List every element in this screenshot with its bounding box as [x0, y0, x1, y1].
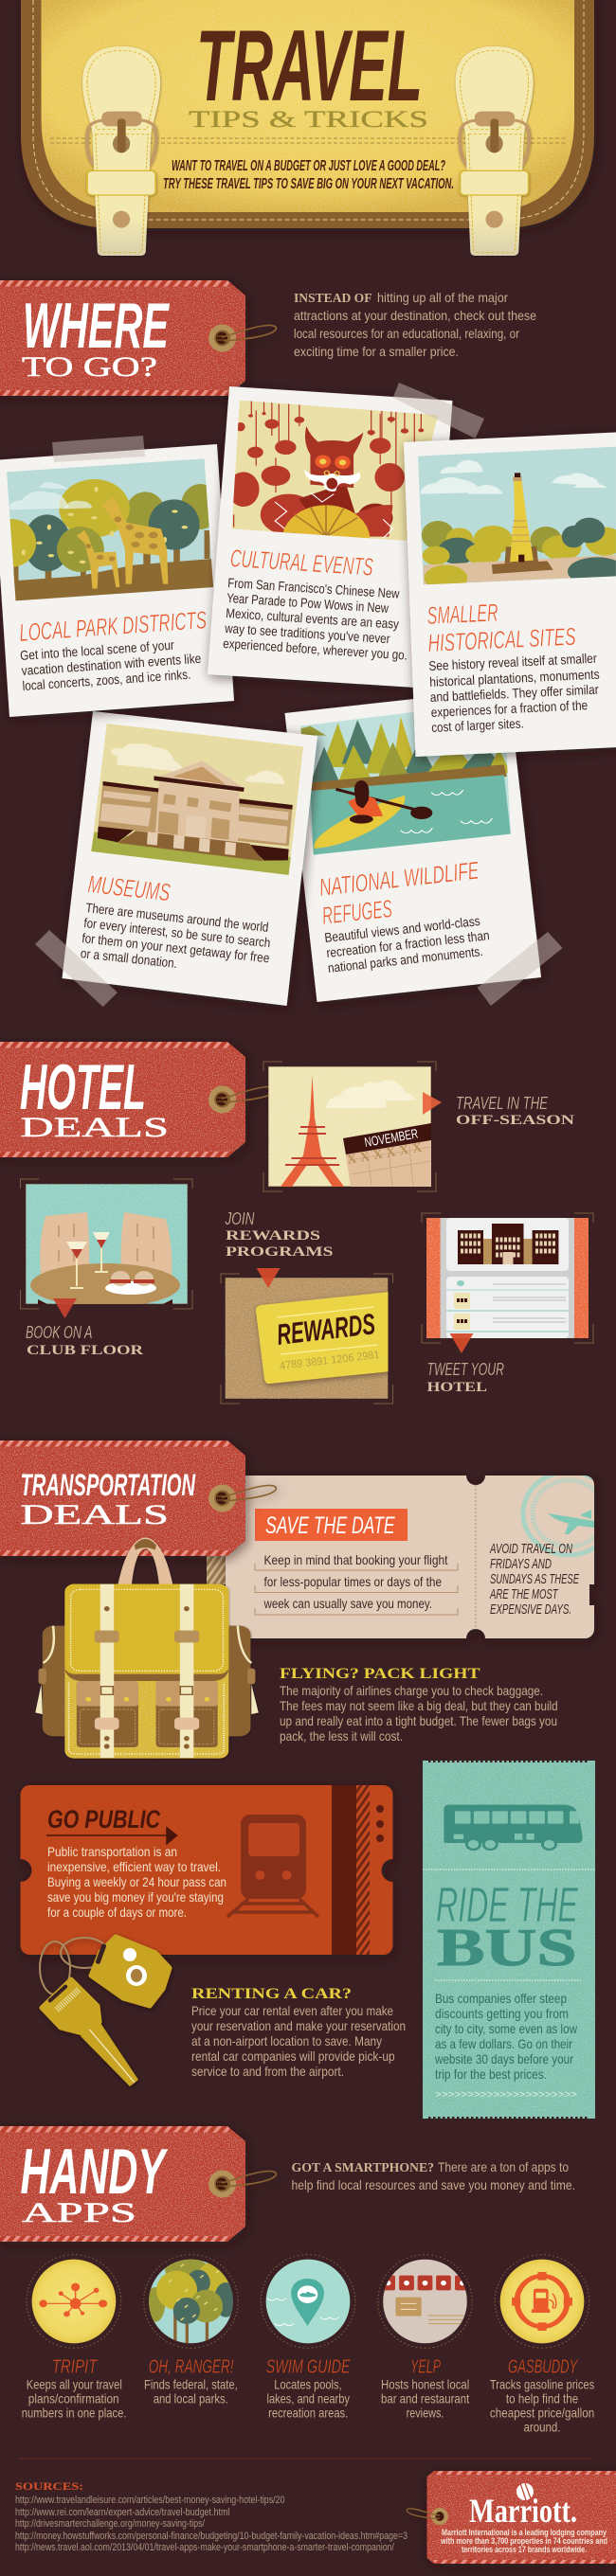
- save the date text: week can usually save you money.: [263, 1596, 432, 1611]
- photo: book on a club floor: [26, 1184, 188, 1318]
- label: book on a club floor: CLUB FLOOR: [27, 1343, 143, 1358]
- label: travel in the off-season: OFF-SEASON: [456, 1113, 574, 1128]
- text: renting a car: service to and from the airport.: [191, 2064, 344, 2079]
- text: renting a car: at a non-airport location to save. Many: [191, 2033, 382, 2048]
- body text: city to city, some even as low: [435, 2021, 578, 2036]
- perforation: [475, 1485, 477, 1629]
- text: recreation for a fraction less than: [326, 927, 490, 960]
- body text: inexpensive, efficient way to travel.: [47, 1859, 221, 1874]
- left strap: [82, 46, 160, 256]
- text: [223, 575, 408, 663]
- avoid travel text: [489, 1542, 579, 1618]
- app: swim guide: recreation areas.: [268, 2406, 348, 2421]
- text: Get into the local scene of your: [20, 637, 175, 663]
- body text: save you big money if you're staying: [47, 1889, 224, 1905]
- app: yelp: [381, 2357, 469, 2421]
- text: flying pack light: The fees may not seem like a big deal, but they can build: [280, 1698, 558, 1713]
- tape: [392, 383, 484, 438]
- intro text: handy apps: [292, 2159, 575, 2192]
- icon: yelp: [378, 2255, 472, 2348]
- label: tweet your hotel: TWEET YOUR: [426, 1360, 504, 1379]
- sources: http://drivesmarterchallenge.org/money-saving-tips/: [15, 2518, 206, 2530]
- photo: rewards card: [226, 1268, 390, 1399]
- panel: ride the bus: [423, 1761, 595, 2119]
- save the date text: for less-popular times or days of the: [263, 1574, 442, 1589]
- photo: travel in the off-season: [268, 1066, 442, 1187]
- text: way to see traditions you've never: [224, 620, 390, 646]
- section tag: hotel deals: [0, 1042, 277, 1157]
- text: Year Parade to Pow Wows in New: [226, 590, 390, 616]
- body text: Bus companies offer steep: [435, 1991, 567, 2006]
- avoid travel text: AVOID TRAVEL ON: [489, 1542, 572, 1557]
- scalloped edges: [428, 1762, 589, 2118]
- app: tripit: plans/confirmation: [28, 2391, 119, 2406]
- photo: tweet your hotel: [426, 1218, 589, 1353]
- intro text: where to go: attractions at your destination, check out these: [294, 308, 536, 323]
- text: [20, 637, 202, 693]
- text: renting a car: RENTING A CAR?: [191, 1986, 352, 2002]
- label: tweet your hotel: [426, 1360, 504, 1395]
- text: flying pack light: up and really eat into a tight budget. The fewer bags you: [280, 1713, 557, 1728]
- text: national parks and monuments.: [327, 943, 483, 975]
- title: CULTURAL EVENTS: [229, 544, 374, 581]
- divider: [423, 1869, 595, 1980]
- title: [426, 598, 577, 657]
- title: MUSEUMS: [86, 869, 172, 906]
- app: swim guide: SWIM GUIDE: [266, 2357, 351, 2378]
- label: join rewards programs: JOIN: [225, 1209, 255, 1228]
- ticket body: [226, 1476, 594, 1638]
- label: tweet your hotel: HOTEL: [426, 1380, 487, 1395]
- icon: train: [227, 1815, 318, 1917]
- intro text: where to go: exciting time for a smaller price.: [294, 344, 459, 359]
- background: [26, 1184, 188, 1304]
- app: tripit: TRIPIT: [52, 2357, 99, 2378]
- divider: [19, 2458, 592, 2460]
- label: book on a club floor: [26, 1323, 143, 1358]
- section tag: handy apps: [0, 2126, 277, 2242]
- text: renting a car: your reservation and make your reservation: [191, 2018, 406, 2033]
- tagline: [163, 158, 454, 192]
- hatch stub: [207, 1556, 227, 1584]
- sources: [15, 2479, 408, 2553]
- illustration: clouds: [326, 1080, 416, 1108]
- stitching: [33, 0, 584, 220]
- perforation dots: [376, 1805, 384, 1842]
- text: for them on your next getaway for free: [82, 930, 270, 965]
- body text: for a couple of days or more.: [47, 1905, 187, 1920]
- body text: as a few dollars. Go on their: [435, 2036, 572, 2051]
- seam: [50, 138, 566, 143]
- icon: swim guide: [261, 2255, 355, 2348]
- card paper: [208, 386, 453, 689]
- section tag: transportation deals: TRANSPORTATION: [21, 1468, 196, 1502]
- logo symbol: [516, 2483, 534, 2500]
- panel body: [423, 1761, 595, 2119]
- text: [324, 913, 490, 975]
- ticket: go public: [21, 1785, 392, 1955]
- body text: website 30 days before your: [434, 2051, 573, 2066]
- background: [268, 1066, 431, 1187]
- icon: gasbuddy: [495, 2255, 589, 2348]
- app: swim guide: Locates pools,: [274, 2377, 342, 2392]
- sponsor tag: marriott: [407, 2471, 616, 2564]
- card paper: [63, 711, 317, 1006]
- label: travel in the off-season: TRAVEL IN THE: [456, 1094, 549, 1113]
- title: LOCAL PARK DISTRICTS: [18, 605, 208, 647]
- section tag: handy apps: HANDY: [21, 2136, 169, 2208]
- feed panel: [446, 1277, 569, 1338]
- arrow: [450, 1333, 474, 1353]
- subtitle: TIPS & TRICKS: [189, 107, 428, 133]
- card paper: [404, 432, 616, 757]
- app: tripit: Keeps all your travel: [27, 2377, 122, 2392]
- section tag: transportation deals: DEALS: [21, 1499, 169, 1530]
- yellow rewards card: 4789 3891 1206 2981: [279, 1350, 380, 1372]
- text: local concerts, zoos, and ice rinks.: [22, 667, 191, 693]
- hotel panel: [446, 1218, 569, 1271]
- title: REFUGES: [320, 894, 394, 930]
- illustration: calendar: XXXXXX: [346, 1141, 424, 1168]
- stamp and plane: [521, 1476, 594, 1557]
- text: experienced before, wherever you go.: [223, 635, 408, 663]
- illustration: kayak: [300, 712, 511, 854]
- intro text: where to go: [294, 290, 536, 359]
- illustration: museum: [91, 724, 303, 875]
- arrow: [257, 1268, 281, 1288]
- app: yelp: bar and restaurant: [381, 2391, 469, 2406]
- sources: http://news.travel.aol.com/2013/04/01/travel-apps-make-your-smartphone-a-smarter-travel-companion/: [15, 2542, 395, 2553]
- app: gasbuddy: cheapest price/gallon: [490, 2406, 594, 2421]
- orange background: [426, 1218, 589, 1338]
- section tag: where to go: [0, 280, 277, 396]
- text: From San Francisco's Chinese New: [227, 575, 401, 601]
- card paper: [284, 689, 541, 1002]
- text: renting a car: rental car companies will provide pick-up: [191, 2048, 395, 2064]
- chevrons: >>>>>>>>>>>>>>>>>>>>>>: [435, 2089, 577, 2101]
- body text: Public transportation is an: [47, 1844, 177, 1859]
- body text: discounts getting you from: [435, 2006, 569, 2021]
- app: oh ranger: and local parks.: [154, 2391, 228, 2406]
- heading: GO PUBLIC: [47, 1805, 160, 1834]
- card paper: [0, 444, 234, 717]
- text: flying pack light: FLYING? PACK LIGHT: [280, 1666, 480, 1682]
- tape: [478, 932, 563, 1006]
- app: yelp: YELP: [410, 2357, 441, 2378]
- text: [80, 900, 271, 971]
- logo wordmark: Marriott.: [469, 2492, 577, 2530]
- title: TRAVEL: [196, 9, 423, 122]
- tape: [35, 930, 118, 1007]
- description: [440, 2528, 607, 2554]
- text: renting a car: [191, 1986, 406, 2079]
- illustration: lounge: [30, 1212, 180, 1307]
- section tag: transportation deals: [0, 1440, 277, 1556]
- text: There are museums around the world: [85, 900, 269, 935]
- yellow canvas: [42, 0, 574, 212]
- photo card: museums: [35, 711, 317, 1007]
- sources: http://www.travelandleisure.com/articles/best-money-saving-hotel-tips/20: [15, 2495, 284, 2506]
- ticket body: [21, 1785, 392, 1955]
- intro text: handy apps: There are a ton of apps to: [438, 2159, 569, 2174]
- photo card: smaller historical sites: [404, 432, 616, 757]
- photo card: local park districts: [0, 436, 234, 717]
- background: [226, 1278, 389, 1399]
- text: flying pack light: The majority of airlines charge you to check baggage.: [280, 1683, 543, 1698]
- text: Beautiful views and world-class: [324, 913, 480, 945]
- app: oh ranger: OH, RANGER!: [149, 2357, 234, 2378]
- right strap: [456, 46, 534, 256]
- label: join rewards programs: REWARDS: [226, 1228, 320, 1243]
- label: join rewards programs: [225, 1209, 334, 1260]
- illustration: giraffes: [7, 458, 213, 600]
- illustration: calendar: NOVEMBER: [363, 1125, 419, 1150]
- illustration: calendar: [343, 1123, 431, 1187]
- label: book on a club floor: BOOK ON A: [26, 1323, 93, 1342]
- phone screen: [441, 1218, 574, 1338]
- suitcase leather flap: [21, 0, 594, 228]
- text: cost of larger sites.: [431, 715, 524, 735]
- text: renting a car: Price your car rental even after you make: [191, 2003, 393, 2018]
- intro text: handy apps: help find local resources and save you money and time.: [292, 2177, 575, 2192]
- app: oh ranger: Finds federal, state,: [144, 2377, 238, 2392]
- description: territories across 17 brands worldwide.: [462, 2545, 587, 2554]
- section tag: hotel deals: DEALS: [21, 1112, 169, 1143]
- section tag: handy apps: APPS: [22, 2197, 136, 2228]
- save the date banner: SAVE THE DATE: [265, 1512, 395, 1539]
- app: swim guide: [266, 2357, 351, 2421]
- avoid travel text: EXPENSIVE DAYS.: [490, 1602, 571, 1618]
- ticket band: [332, 1785, 356, 1955]
- text: vacation destination with events like: [21, 651, 202, 678]
- arrow: [53, 1298, 77, 1318]
- intro text: where to go: hitting up all of the major: [377, 290, 508, 305]
- title: [317, 856, 480, 930]
- yellow rewards card: REWARDS: [275, 1307, 377, 1351]
- app: yelp: Hosts honest local: [381, 2377, 469, 2392]
- icon: backpack: [35, 1537, 259, 1759]
- app: yelp: reviews.: [407, 2406, 444, 2421]
- app: gasbuddy: [490, 2357, 594, 2435]
- arrow: [423, 1092, 442, 1115]
- illustration: monument: [416, 442, 616, 590]
- yellow rewards card: [256, 1292, 390, 1384]
- body text: trip for the best prices.: [435, 2066, 547, 2082]
- label: join rewards programs: PROGRAMS: [226, 1244, 334, 1260]
- ticket: save the date: [207, 1472, 614, 1638]
- title: SMALLER: [426, 598, 498, 630]
- arrow: [46, 1828, 176, 1844]
- intro text: where to go: INSTEAD OF: [294, 292, 371, 306]
- app: tripit: [22, 2357, 126, 2421]
- save the date banner: [255, 1509, 408, 1541]
- body text: [47, 1844, 226, 1920]
- app: swim guide: lakes, and nearby: [267, 2391, 350, 2406]
- text: flying pack light: pack, the less it will cost.: [280, 1728, 403, 1744]
- sources: http://money.howstuffworks.com/personal-finance/budgeting/10-budget-family-vacation-ideas.htm#page=3: [15, 2531, 408, 2542]
- app: gasbuddy: to help find the: [506, 2391, 578, 2406]
- text: for every interest, so be sure to search: [83, 915, 271, 950]
- intro text: handy apps: GOT A SMARTPHONE?: [292, 2161, 434, 2175]
- tape: [52, 436, 145, 462]
- app: gasbuddy: around.: [523, 2420, 561, 2435]
- body text: [434, 1991, 578, 2082]
- label: travel in the off-season: [456, 1094, 574, 1128]
- app: gasbuddy: GASBUDDY: [508, 2357, 578, 2378]
- heading: [436, 1878, 579, 1977]
- icon: car keys: [40, 1937, 170, 2086]
- icon: oh ranger: [144, 2255, 238, 2348]
- photo card: cultural events: [208, 383, 484, 689]
- text: flying pack light: [280, 1666, 558, 1744]
- icon: bus: [444, 1805, 583, 1850]
- illustration: eiffel tower: [281, 1075, 344, 1187]
- panel: suitcase header: [21, 0, 594, 256]
- sources: SOURCES:: [15, 2479, 83, 2493]
- icon: tripit: [27, 2255, 121, 2348]
- avoid travel text: ARE THE MOST: [489, 1587, 558, 1602]
- avoid travel text: FRIDAYS AND: [490, 1557, 552, 1572]
- app: tripit: numbers in one place.: [22, 2406, 126, 2421]
- app: oh ranger: [144, 2357, 238, 2406]
- section tag: where to go: TO GO?: [22, 351, 157, 383]
- intro text: where to go: local resources for an educational, relaxing, or: [294, 326, 519, 341]
- text: Mexico, cultural events are an easy: [226, 605, 399, 632]
- title: NATIONAL WILDLIFE: [317, 856, 480, 902]
- sources: http://www.rei.com/learn/expert-advice/travel-budget.html: [15, 2507, 229, 2518]
- save the date text: Keep in mind that booking your flight: [263, 1552, 448, 1567]
- section tag: where to go: WHERE: [23, 290, 171, 362]
- text: experiences for a fraction of the: [430, 697, 589, 720]
- text: or a small donation.: [80, 945, 178, 971]
- illustration: dragon: [231, 400, 438, 541]
- section tag: hotel deals: HOTEL: [20, 1051, 146, 1123]
- app icons: [27, 2255, 589, 2348]
- brackets: [21, 1062, 593, 1404]
- save the date text: [255, 1552, 458, 1615]
- text: [428, 651, 600, 735]
- photo card: national wildlife refuges: [284, 689, 563, 1006]
- body text: Buying a weekly or 24 hour pass can: [47, 1874, 226, 1889]
- heading: BUS: [437, 1919, 576, 1977]
